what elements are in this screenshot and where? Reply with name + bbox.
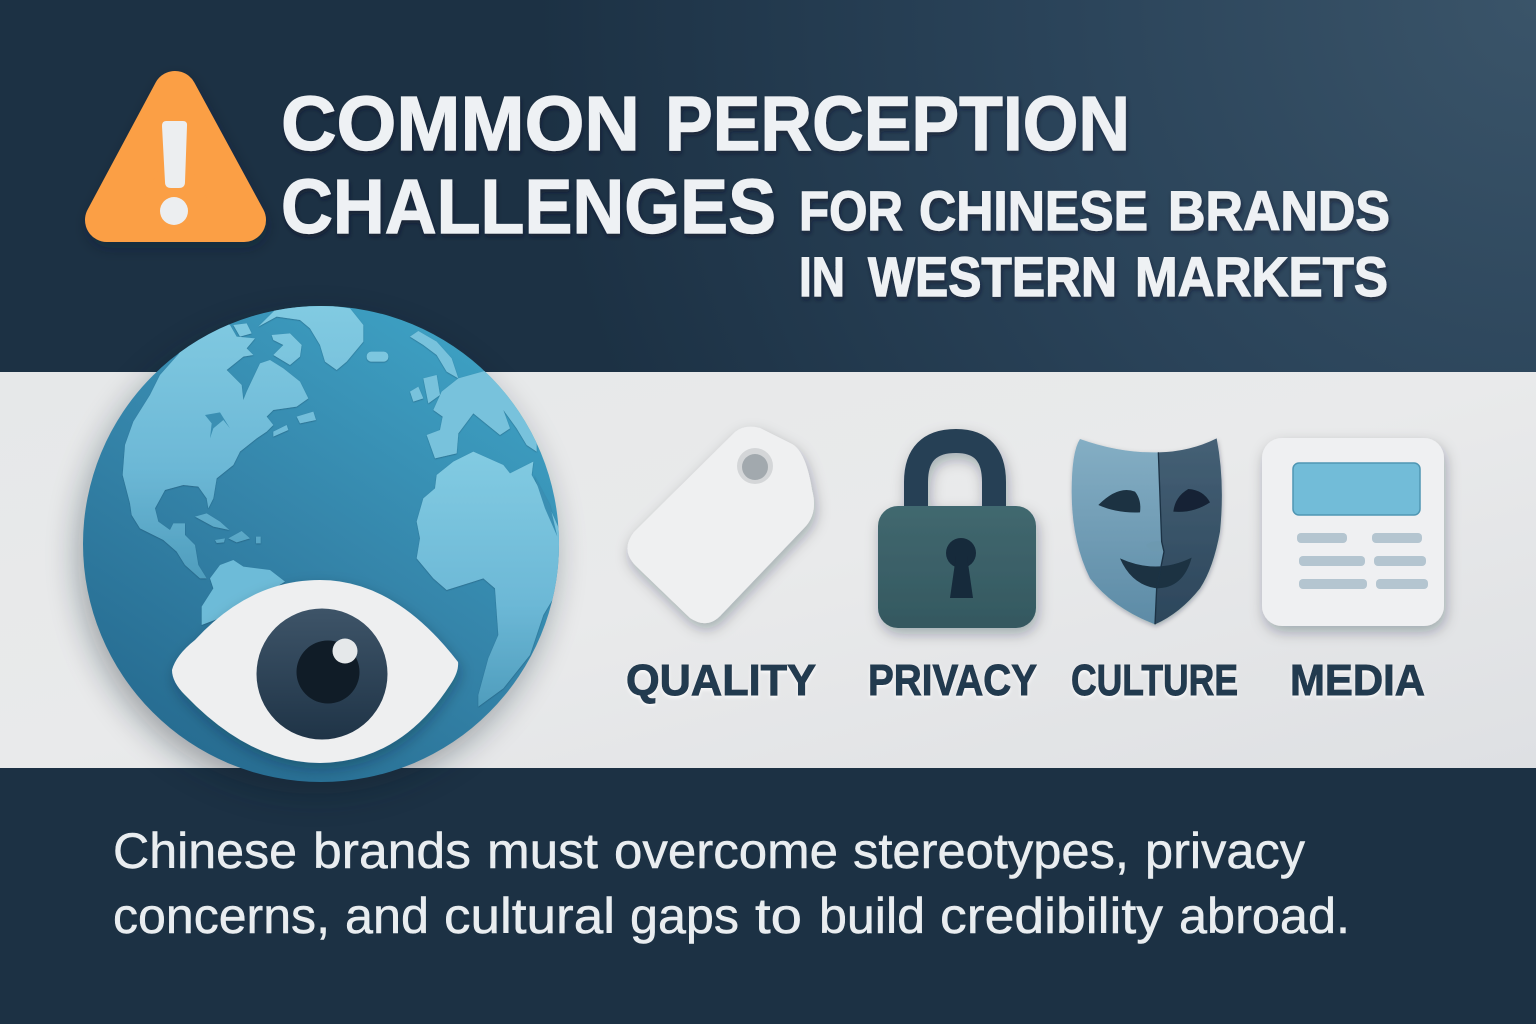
summary text: Chinese bbox=[113, 823, 297, 879]
continents: africa bbox=[417, 452, 563, 707]
title: BRANDS bbox=[1168, 179, 1390, 242]
bottom bar bbox=[0, 768, 1536, 1024]
summary text: concerns, bbox=[113, 888, 330, 944]
title: CHALLENGES bbox=[281, 164, 776, 250]
title bbox=[281, 81, 1390, 308]
title: IN bbox=[799, 245, 845, 308]
icon: quality tag bbox=[627, 427, 814, 623]
summary text: to bbox=[755, 888, 802, 944]
eye bbox=[172, 580, 458, 763]
summary text: and bbox=[345, 888, 429, 944]
summary text: abroad. bbox=[1179, 888, 1350, 944]
icon labels bbox=[626, 656, 1425, 705]
title: CHINESE bbox=[919, 179, 1148, 242]
icon: media newspaper bbox=[1262, 438, 1444, 626]
continents: iceland bbox=[367, 352, 388, 362]
summary text bbox=[113, 823, 1350, 944]
summary text: credibility bbox=[940, 888, 1163, 944]
continents: north america and islands bbox=[123, 302, 363, 578]
continents: europe bbox=[410, 331, 537, 458]
summary text: must bbox=[487, 823, 598, 879]
icon labels: CULTURE bbox=[1071, 656, 1238, 705]
title: COMMON bbox=[281, 81, 640, 167]
summary text: build bbox=[819, 888, 925, 944]
icon labels: MEDIA bbox=[1290, 656, 1425, 705]
icon: globe with eye bbox=[78, 302, 563, 794]
continents: south america bbox=[202, 560, 285, 625]
title: FOR bbox=[799, 179, 903, 242]
continents: red sea slit bbox=[534, 475, 557, 537]
title: PERCEPTION bbox=[665, 81, 1130, 167]
title: WESTERN bbox=[868, 245, 1117, 308]
icon labels: PRIVACY bbox=[868, 656, 1037, 705]
summary text: overcome bbox=[614, 823, 838, 879]
continents: great lakes bbox=[205, 412, 230, 438]
summary text: stereotypes, bbox=[853, 823, 1129, 879]
panel: light icon band bbox=[0, 372, 1536, 768]
summary text: gaps bbox=[630, 888, 739, 944]
icon: culture mask bbox=[1072, 438, 1222, 624]
icon labels: QUALITY bbox=[626, 656, 816, 705]
summary text: cultural bbox=[444, 888, 615, 944]
icon: warning triangle bbox=[107, 93, 244, 225]
summary text: brands bbox=[313, 823, 471, 879]
title: MARKETS bbox=[1135, 245, 1388, 308]
summary text: privacy bbox=[1145, 823, 1305, 879]
icon: privacy padlock bbox=[878, 441, 1036, 628]
